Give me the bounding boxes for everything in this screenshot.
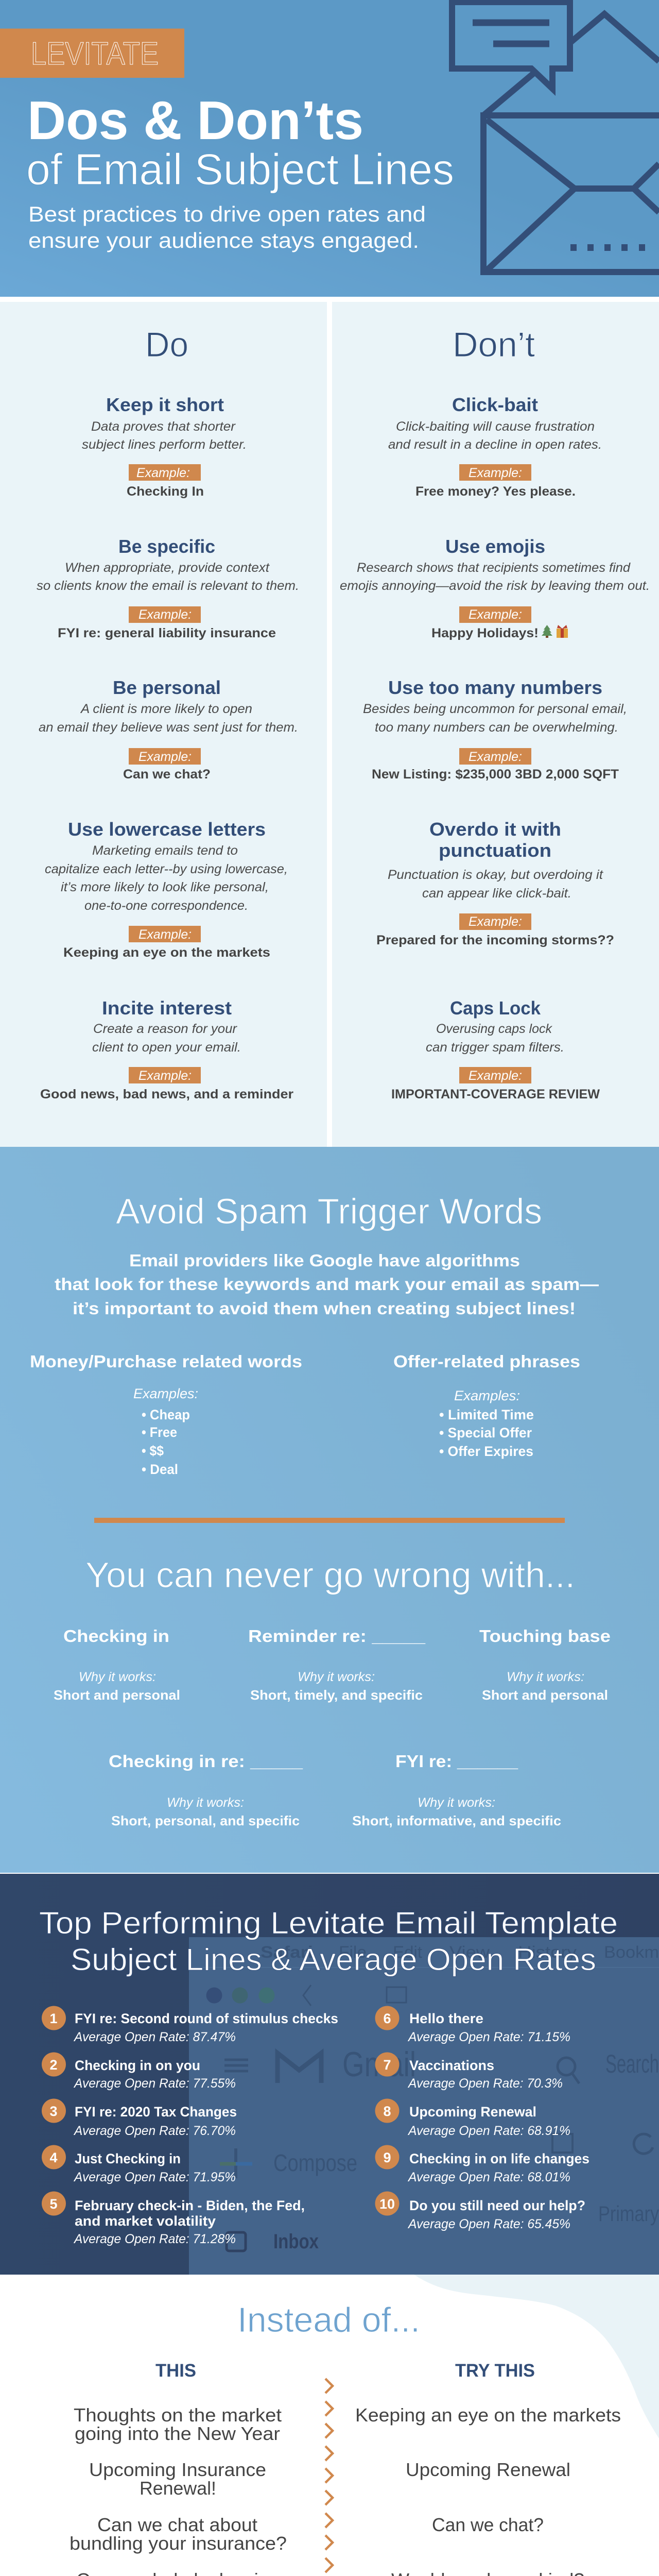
option: touching base — [479, 1626, 611, 1703]
option: touching base: Short and personal — [482, 1687, 608, 1703]
item: incite interest — [40, 997, 293, 1101]
list entry 6: Average Open Rate: 71.15% — [407, 2030, 570, 2044]
item: overdo it with punctuation — [376, 819, 614, 947]
list entry 4: Average Open Rate: 71.95% — [73, 2170, 236, 2184]
item: caps lock: can trigger spam filters. — [426, 1040, 564, 1055]
background: gmail screenshot ghost: View — [449, 1943, 490, 1961]
column: original subject lines: going into the New Year — [75, 2423, 280, 2444]
list entry 8: Average Open Rate: 68.91% — [407, 2124, 570, 2138]
column: money words — [30, 1352, 302, 1477]
item: caps lock: Example: — [469, 1069, 522, 1083]
item: overdo it with punctuation: Overdo it with — [429, 819, 561, 840]
option: fyi re: Short, informative, and specific — [352, 1813, 561, 1828]
background: gmail screenshot ghost: Inbox — [273, 2230, 319, 2253]
heading: do: Do — [145, 325, 188, 364]
list entry 3: 3 — [49, 2104, 58, 2119]
column: suggested subject lines: Upcoming Renewal — [406, 2459, 570, 2480]
item: overdo it with punctuation: punctuation — [439, 840, 551, 861]
intro text: ensure your audience stays engaged. — [28, 228, 419, 252]
option: checking in: Why it works: — [79, 1670, 156, 1684]
list entry 2: Average Open Rate: 77.55% — [73, 2076, 236, 2091]
column: original subject lines: Upcoming Insurance — [89, 2459, 266, 2480]
item: incite interest: client to open your email. — [92, 1040, 241, 1055]
list entry 10: 10 — [379, 2196, 395, 2212]
icon: christmas tree — [542, 625, 552, 638]
item: use lowercase letters: Example: — [138, 927, 192, 942]
list entry 1 — [42, 2006, 338, 2044]
list entry 4: 4 — [49, 2150, 58, 2165]
option: checking in re — [109, 1752, 303, 1828]
list entry 3: Average Open Rate: 76.70% — [73, 2124, 236, 2138]
item: be specific: When appropriate, provide context — [65, 561, 270, 575]
list entry 5 — [42, 2192, 305, 2246]
item: be specific: so clients know the email is relevant to them. — [37, 579, 299, 593]
item: use lowercase letters — [45, 819, 288, 960]
list entry 5: and market volatility — [75, 2213, 216, 2229]
item: incite interest: Good news, bad news, and a reminder — [40, 1087, 293, 1101]
list entry 7: Vaccinations — [409, 2058, 494, 2073]
column header: try this: TRY THIS — [455, 2361, 535, 2381]
list entry 5: Average Open Rate: 71.28% — [73, 2232, 236, 2246]
column: offer phrases: Examples: — [454, 1388, 520, 1403]
item: be personal: A client is more likely to open — [80, 702, 252, 716]
list entry 6: Hello there — [409, 2011, 483, 2026]
option: checking in: Checking in — [63, 1626, 169, 1646]
column: offer phrases: Offer-related phrases — [393, 1352, 580, 1371]
item: be personal: an email they believe was sent just for them. — [39, 720, 298, 735]
background: gmail screenshot ghost: Bookm — [604, 1943, 659, 1961]
list entry 8 — [375, 2099, 570, 2138]
list entry 9: Average Open Rate: 68.01% — [407, 2170, 570, 2184]
heading: instead of: Instead of... — [237, 2300, 420, 2340]
item: keep it short: subject lines perform better. — [82, 437, 247, 452]
paragraph: spam explanation: that look for these keywords and mark your email as spam— — [55, 1275, 599, 1294]
list entry 3: FYI re: 2020 Tax Changes — [75, 2104, 237, 2120]
list entry 5: 5 — [49, 2196, 58, 2212]
column: original subject lines: bundling your insurance? — [70, 2533, 287, 2554]
item: use emojis: Research shows that recipients sometimes find — [357, 561, 631, 575]
paragraph: spam explanation: Email providers like Google have algorithms — [129, 1251, 520, 1270]
column: money words: • $$ — [142, 1443, 164, 1459]
list entry 7: 7 — [383, 2057, 391, 2073]
column: offer phrases: • Special Offer — [439, 1425, 532, 1440]
list entry 2: 2 — [49, 2057, 58, 2073]
item: click-bait: Click-bait — [452, 394, 538, 415]
item: incite interest: Create a reason for your — [93, 1022, 238, 1036]
item: click-bait: Click-baiting will cause frustration — [396, 419, 595, 434]
item: caps lock: Overusing caps lock — [436, 1022, 552, 1036]
item: use too many numbers: New Listing: $235,000 3BD 2,000 SQFT — [372, 767, 619, 782]
column: original subject lines — [45, 2404, 310, 2576]
list entry 2 — [42, 2053, 236, 2091]
heading: don't: Don’t — [453, 325, 535, 364]
background: gmail screenshot ghost: History — [518, 1943, 577, 1961]
subtitle heading: of Email Subject Lines — [26, 145, 454, 194]
item: be specific: Be specific — [118, 536, 215, 557]
option: reminder re: Reminder re: _____ — [248, 1626, 426, 1646]
list entry 9: Checking in on life changes — [409, 2151, 589, 2166]
option: fyi re — [352, 1752, 561, 1828]
list entry 1: Average Open Rate: 87.47% — [73, 2030, 236, 2044]
item: use emojis: Example: — [469, 607, 522, 622]
item: use too many numbers: Example: — [469, 750, 522, 764]
list entry 6 — [375, 2006, 570, 2044]
list entry 7: Average Open Rate: 70.3% — [407, 2076, 563, 2091]
item: overdo it with punctuation: Punctuation is okay, but overdoing it — [388, 868, 603, 882]
column header: this: THIS — [155, 2361, 196, 2381]
option: checking in — [54, 1626, 180, 1703]
arrows: chevron column — [325, 2379, 333, 2576]
item: click-bait: Example: — [469, 466, 522, 480]
option: fyi re: Why it works: — [418, 1795, 495, 1810]
option: reminder re: Short, timely, and specific — [250, 1687, 423, 1703]
item: click-bait: Free money? Yes please. — [415, 484, 576, 499]
item: use too many numbers: too many numbers can be overwhelming. — [375, 720, 618, 735]
list entry 8: 8 — [383, 2104, 391, 2119]
paragraph: spam explanation: it’s important to avoid them when creating subject lines! — [73, 1299, 576, 1318]
item: caps lock — [391, 997, 600, 1101]
column: money words: Examples: — [133, 1386, 198, 1401]
item: incite interest: Example: — [138, 1069, 192, 1083]
panel: do — [0, 302, 327, 1147]
intro text — [28, 202, 426, 252]
column: money words: • Free — [142, 1425, 177, 1440]
option: reminder re: Why it works: — [298, 1670, 375, 1684]
list entry 10: Do you still need our help? — [409, 2198, 585, 2213]
item: use emojis: Happy Holidays! — [431, 626, 539, 640]
column: money words: • Cheap — [142, 1407, 190, 1422]
panel: don't — [332, 302, 659, 1147]
divider bar — [94, 1518, 565, 1523]
list entry 4: Just Checking in — [75, 2151, 181, 2166]
list entry 7 — [375, 2053, 563, 2091]
item: use too many numbers — [363, 677, 627, 782]
list entry 9 — [375, 2145, 589, 2184]
background: gmail screenshot ghost: File — [339, 1943, 367, 1961]
list entry 1: FYI re: Second round of stimulus checks — [75, 2011, 338, 2026]
list entry 1: 1 — [49, 2011, 58, 2026]
item: use emojis — [340, 536, 650, 640]
column: suggested subject lines: Can we chat? — [432, 2514, 544, 2535]
item: click-bait — [388, 394, 602, 499]
item: use lowercase letters: capitalize each letter--by using lowercase, — [45, 862, 288, 876]
option: touching base: Touching base — [479, 1626, 611, 1646]
background: gmail screenshot ghost: Compose — [273, 2149, 357, 2176]
logo badge — [0, 29, 184, 78]
item: overdo it with punctuation: Example: — [469, 914, 522, 929]
item: keep it short: Checking In — [127, 484, 204, 499]
option: checking in re: Short, personal, and specific — [111, 1813, 300, 1828]
item: be specific — [37, 536, 299, 640]
item: overdo it with punctuation: Prepared for the incoming storms?? — [376, 933, 614, 947]
option: touching base: Why it works: — [507, 1670, 584, 1684]
item: use lowercase letters: Keeping an eye on the markets — [63, 945, 270, 960]
list entry 4 — [42, 2145, 236, 2184]
item: keep it short: Keep it short — [106, 394, 224, 415]
list entry 2: Checking in on you — [75, 2058, 200, 2073]
item: use lowercase letters: Marketing emails tend to — [92, 843, 238, 858]
column: suggested subject lines: Keeping an eye on the markets — [355, 2404, 621, 2426]
column: money words: Money/Purchase related words — [30, 1352, 302, 1371]
item: keep it short: Example: — [136, 466, 190, 480]
logo badge: LEVITATE — [31, 36, 159, 72]
panel: spam trigger words — [0, 1147, 659, 1873]
list entry 10: Average Open Rate: 65.45% — [407, 2217, 570, 2231]
background: gmail screenshot ghost — [189, 1937, 659, 2275]
title: top performing: Subject Lines & Average Open Rates — [71, 1942, 596, 1977]
item: caps lock: Caps Lock — [450, 997, 541, 1019]
item: keep it short — [82, 394, 247, 499]
icon: speech bubble — [452, 2, 570, 89]
item: caps lock: IMPORTANT-COVERAGE REVIEW — [391, 1087, 600, 1101]
column: suggested subject lines — [355, 2404, 621, 2576]
item: be personal: Can we chat? — [123, 767, 211, 782]
background: gmail screenshot ghost: Safari — [261, 1943, 313, 1961]
item: use lowercase letters: one-to-one correspondence. — [84, 899, 248, 913]
item: use lowercase letters: it’s more likely to look like personal, — [61, 880, 269, 894]
heading: you can never go wrong: You can never go wrong with... — [85, 1555, 575, 1595]
item: be personal — [39, 677, 298, 782]
item: use too many numbers: Use too many numbers — [388, 677, 602, 698]
item: use emojis: emojis annoying—avoid the risk by leaving them out. — [340, 579, 650, 593]
column: offer phrases: • Offer Expires — [439, 1444, 533, 1459]
column: original subject lines: Can we chat about — [97, 2514, 257, 2535]
panel: instead of — [0, 2275, 659, 2576]
column: original subject lines: Renewal! — [140, 2478, 216, 2499]
list entry 8: Upcoming Renewal — [409, 2104, 536, 2120]
item: incite interest: Incite interest — [102, 997, 232, 1019]
item: use lowercase letters: Use lowercase letters — [68, 819, 266, 840]
column: original subject lines: Thoughts on the market — [74, 2404, 282, 2426]
list entry 3 — [42, 2099, 237, 2138]
list entry 10 — [375, 2192, 585, 2231]
list entry 6: 6 — [383, 2011, 391, 2026]
item: be personal: Be personal — [113, 677, 221, 698]
background: gmail screenshot ghost: Edit — [393, 1943, 422, 1961]
option: fyi re: FYI re: ______ — [395, 1752, 518, 1771]
header section — [0, 0, 659, 297]
title: Dos & Don’ts — [27, 90, 363, 151]
column: money words: • Deal — [142, 1462, 178, 1477]
option: reminder re — [248, 1626, 426, 1703]
item: keep it short: Data proves that shorter — [91, 419, 236, 434]
item: be specific: FYI re: general liability insurance — [58, 626, 276, 640]
option: checking in re: Why it works: — [167, 1795, 244, 1810]
paragraph: spam explanation — [55, 1251, 599, 1318]
list entry 9: 9 — [383, 2150, 391, 2165]
background: gmail screenshot ghost: Gmail — [342, 2045, 416, 2084]
panel: top performing templates — [0, 1874, 659, 2275]
intro text: Best practices to drive open rates and — [28, 202, 426, 226]
heading: avoid spam trigger words: Avoid Spam Trigger Words — [116, 1191, 542, 1231]
title: top performing — [39, 1906, 618, 1977]
item: overdo it with punctuation: can appear like click-bait. — [422, 886, 571, 901]
option: checking in re: Checking in re: _____ — [109, 1752, 303, 1771]
item: use too many numbers: Besides being uncommon for personal email, — [363, 702, 627, 716]
item: be personal: Example: — [138, 750, 192, 764]
item: be specific: Example: — [138, 607, 192, 622]
icon: envelope — [483, 14, 659, 272]
icon: gift — [557, 625, 568, 638]
option: checking in: Short and personal — [54, 1687, 180, 1703]
title: top performing: Top Performing Levitate Email Template — [39, 1906, 618, 1940]
column: offer phrases — [393, 1352, 580, 1459]
item: click-bait: and result in a decline in open rates. — [388, 437, 602, 452]
item: use emojis: Use emojis — [445, 536, 545, 557]
column: offer phrases: • Limited Time — [439, 1407, 534, 1422]
list entry 5: February check-in - Biden, the Fed, — [75, 2198, 305, 2213]
